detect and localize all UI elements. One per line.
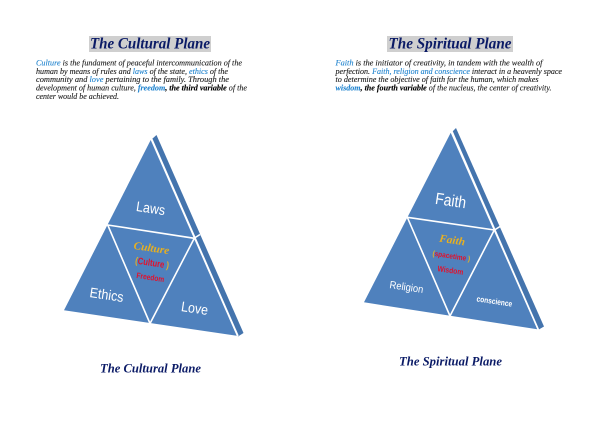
heading: the cultural plane: The Cultural Plane <box>90 36 210 52</box>
text block: culture description: human by means of rules and laws of the state, ethics of the <box>36 66 229 76</box>
label: laws: Laws <box>135 198 166 218</box>
text block: culture description: Culture is the fundament of peaceful intercommunication of the <box>36 58 250 68</box>
text block: faith description: to determine the objective of faith for the human, which makes <box>336 74 539 84</box>
triangle side face <box>152 135 244 336</box>
text block: culture description: development of human culture, freedom, the third variable of the <box>36 82 248 92</box>
label: faith center: Faith <box>437 233 466 248</box>
text block: culture description: community and love pertaining to the family. Through the <box>36 74 231 84</box>
triangle side face <box>452 128 544 330</box>
label: wisdom: Wisdom <box>437 264 464 277</box>
heading: the spiritual plane: The Spiritual Plane <box>388 36 512 52</box>
panel: the spiritual plane <box>335 36 564 368</box>
label: conscience: conscience <box>476 294 513 309</box>
caption: the cultural plane: The Cultural Plane <box>100 360 201 376</box>
label: culture center: Culture <box>133 240 170 257</box>
text block: faith description: wisdom, the fourth variable of the nucleus, the center of creativity. <box>336 82 558 92</box>
label: freedom: Freedom <box>136 271 165 284</box>
text block: faith description: Faith is the initiator of creativity, in tandem with the wealth of <box>336 58 547 68</box>
triangle front face <box>364 133 537 329</box>
panel: the cultural plane <box>36 36 249 376</box>
text block: culture description: center would be achieved. <box>36 91 119 101</box>
chart: spiritual plane triangle <box>364 128 544 330</box>
text block: faith description: perfection. Faith, religion and conscience interact in a heavenly space <box>336 66 567 76</box>
triangle front face <box>64 140 237 336</box>
label: culture in parentheses: (Culture ) <box>134 256 170 271</box>
label: spacetime: (spacetime ) <box>432 249 471 263</box>
label: faith: Faith <box>434 190 467 212</box>
label: ethics: Ethics <box>89 284 125 305</box>
chart: cultural plane triangle <box>64 135 244 336</box>
label: love: Love <box>180 298 209 318</box>
label: religion: Religion <box>389 279 424 296</box>
caption: the spiritual plane: The Spiritual Plane <box>399 354 502 368</box>
